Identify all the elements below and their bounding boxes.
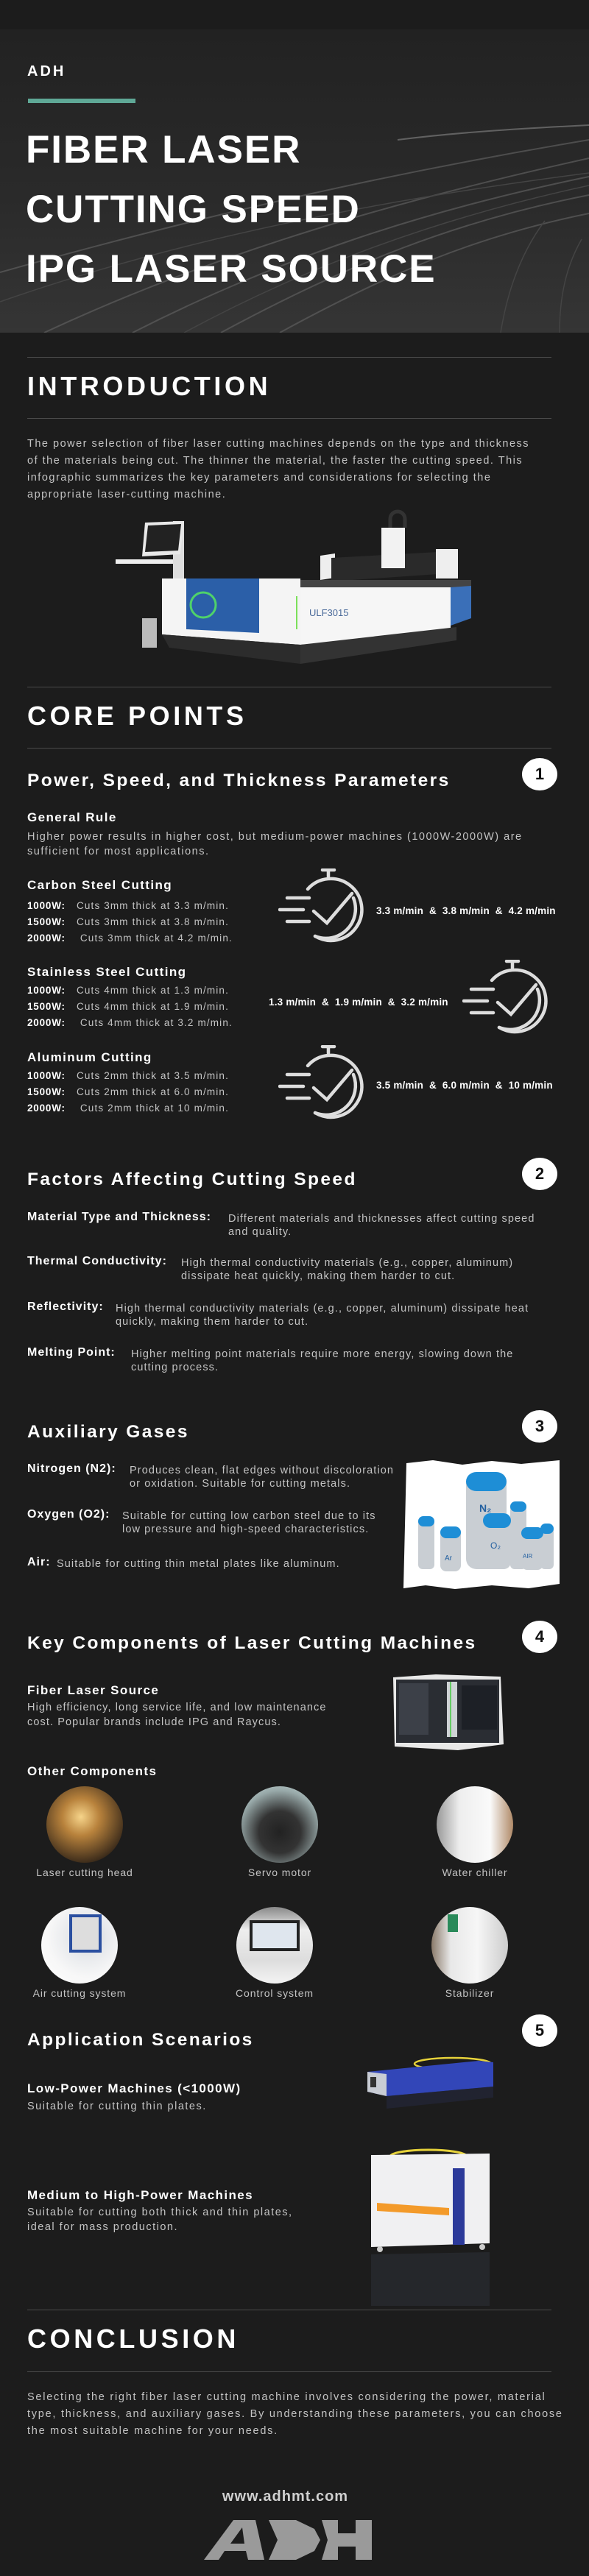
badge 2	[522, 1158, 557, 1190]
factor: reflectivity: Reflectivity:	[27, 1301, 104, 1313]
section 1: power speed thickness: 1000W:	[27, 900, 66, 911]
badge 5: 5	[535, 2021, 544, 2039]
heading 1: Power, Speed, and Thickness Parameters	[27, 771, 451, 790]
section 2: factors	[27, 1158, 557, 1373]
badge 3	[522, 1410, 557, 1443]
brand label ADH: ADH	[27, 63, 66, 79]
heading 5: Application Scenarios	[27, 2030, 254, 2050]
component: water chiller	[437, 1786, 513, 1878]
badge 5	[522, 2014, 557, 2047]
section 5: application scenarios	[27, 2014, 557, 2306]
medium high power: Medium to High-Power Machines	[27, 2188, 253, 2202]
section 1: power speed thickness	[27, 758, 557, 1119]
section 4: key components: cost. Popular brands include IPG and Raycus.	[27, 1716, 281, 1728]
gas: oxygen	[27, 1508, 376, 1535]
intro text: infographic summarizes the key parameters and considerations for selecting the	[27, 472, 491, 484]
component: air cutting system	[32, 1907, 126, 1999]
factor: material	[27, 1211, 535, 1238]
heading: introduction: INTRODUCTION	[27, 371, 271, 401]
gas: oxygen: Suitable for cutting low carbon steel due to its low pressure and high-speed characteristics.	[122, 1510, 376, 1535]
component: stabilizer: Stabilizer	[445, 1987, 494, 1999]
component: control system	[236, 1907, 314, 1999]
badge 3: 3	[535, 1417, 544, 1435]
title	[26, 128, 437, 291]
section 1: power speed thickness: Cuts 3mm thick at 3.8 m/min.	[77, 916, 229, 927]
icon: stopwatch stainless	[462, 960, 548, 1033]
image: gas cylinders: N₂	[479, 1502, 491, 1514]
image: gas cylinders	[403, 1460, 560, 1589]
heading 2: Factors Affecting Cutting Speed	[27, 1170, 357, 1189]
intro text	[27, 438, 529, 500]
gas: nitrogen: Nitrogen (N2):	[27, 1462, 116, 1475]
section 1: power speed thickness: Higher power results in higher cost, but medium-power machines (1000W-2000W) are	[27, 831, 523, 843]
component: control system: Control system	[236, 1987, 314, 1999]
intro text: of the materials being cut. The thinner the material, the faster the cutting speed. This	[27, 455, 523, 467]
section 1: power speed thickness: sufficient for most applications.	[27, 846, 209, 857]
component: servo motor: Servo motor	[248, 1866, 311, 1878]
image: laser cutting machine: ULF3015	[309, 607, 348, 618]
title: CUTTING SPEED	[26, 188, 361, 231]
badge 2: 2	[535, 1164, 544, 1183]
section 5: application scenarios: Suitable for cutting thin plates.	[27, 2101, 207, 2112]
conclusion text: the most suitable machine for your needs.	[27, 2425, 278, 2437]
icon: stopwatch carbon	[278, 868, 364, 942]
section 5: application scenarios: ideal for mass production.	[27, 2221, 178, 2233]
section 1: power speed thickness: Cuts 3mm thick at 3.3 m/min.	[77, 900, 229, 911]
factor: material: Material Type and Thickness:	[27, 1211, 211, 1223]
image: laser cutting machine	[116, 509, 471, 664]
section 1: power speed thickness: Cuts 4mm thick at 1.9 m/min.	[77, 1001, 229, 1012]
logo: ADH	[204, 2520, 372, 2560]
section 1: power speed thickness: 1500W:	[27, 1086, 66, 1097]
heading: conclusion: CONCLUSION	[27, 2324, 239, 2354]
section 1: power speed thickness: 2000W:	[27, 933, 66, 944]
heading 3: Auxiliary Gases	[27, 1422, 189, 1442]
section 5: application scenarios: Suitable for cutting both thick and thin plates,	[27, 2207, 293, 2218]
component: laser cutting head: Laser cutting head	[36, 1866, 133, 1878]
section 1: power speed thickness: 3.5 m/min & 6.0 m/min & 10 m/min	[376, 1080, 553, 1091]
component: water chiller: Water chiller	[442, 1866, 507, 1878]
section 1: power speed thickness: 1500W:	[27, 916, 66, 927]
section 4: key components: High efficiency, long service life, and low maintenance	[27, 1702, 327, 1713]
section 1: power speed thickness: 2000W:	[27, 1103, 66, 1114]
hero banner	[0, 29, 589, 333]
factor: reflectivity: High thermal conductivity materials (e.g., copper, aluminum) dissipate heat quickly, making them harder to cut.	[116, 1303, 529, 1328]
fiber laser source: Fiber Laser Source	[27, 1683, 159, 1697]
gas: air: Suitable for cutting thin metal plates like aluminum.	[57, 1558, 340, 1570]
heading 4: Key Components of Laser Cutting Machines	[27, 1633, 477, 1653]
badge 1: 1	[535, 765, 544, 783]
section 1: power speed thickness: Cuts 2mm thick at 3.5 m/min.	[77, 1070, 229, 1081]
factor: melting: Higher melting point materials require more energy, slowing down the cutting process.	[131, 1348, 513, 1373]
image: gas cylinders: O₂	[490, 1540, 501, 1551]
section 1: power speed thickness: 1000W:	[27, 1070, 66, 1081]
title: FIBER LASER	[26, 128, 301, 171]
general rule: General Rule	[27, 810, 117, 824]
aluminum: Aluminum Cutting	[27, 1050, 152, 1064]
low power: Low-Power Machines (<1000W)	[27, 2081, 241, 2095]
conclusion text: type, thickness, and auxiliary gases. By understanding these parameters, you can choose	[27, 2408, 563, 2420]
section 1: power speed thickness: Cuts 2mm thick at 10 m/min.	[80, 1103, 229, 1114]
component: laser cutting head	[36, 1786, 133, 1878]
factor: melting: Melting Point:	[27, 1346, 116, 1359]
factor: material: Different materials and thicknesses affect cutting speed and quality.	[228, 1213, 535, 1238]
intro text: The power selection of fiber laser cutting machines depends on the type and thickness	[27, 438, 529, 450]
conclusion text	[27, 2391, 563, 2437]
factor: thermal: Thermal Conductivity:	[27, 1255, 167, 1267]
component: stabilizer	[431, 1907, 508, 1999]
image: high power laser source	[371, 2149, 490, 2306]
icon: stopwatch aluminum	[278, 1045, 364, 1119]
image: low power laser source	[367, 2056, 493, 2109]
factor: thermal	[27, 1255, 513, 1282]
image: gas cylinders: Ar	[445, 1554, 453, 1563]
image: laser source	[393, 1674, 504, 1750]
section 1: power speed thickness: 2000W:	[27, 1017, 66, 1028]
image: gas cylinders: AIR	[523, 1553, 533, 1560]
badge 4: 4	[535, 1627, 544, 1646]
badge 1	[522, 758, 557, 790]
carbon steel: Carbon Steel Cutting	[27, 878, 172, 892]
factor: thermal: High thermal conductivity materials (e.g., copper, aluminum) dissipate heat quickly, making them harder to cut.	[181, 1257, 513, 1282]
teal accent bar	[28, 99, 135, 103]
section 1: power speed thickness: 1000W:	[27, 985, 66, 996]
component: air cutting system: Air cutting system	[33, 1987, 126, 1999]
section 1: power speed thickness: Cuts 4mm thick at 1.3 m/min.	[77, 985, 229, 996]
gas: nitrogen: Produces clean, flat edges without discoloration or oxidation. Suitable for cutting metals.	[130, 1465, 394, 1490]
section 4: key components	[27, 1621, 557, 1999]
section 1: power speed thickness: 1.3 m/min & 1.9 m/min & 3.2 m/min	[269, 997, 448, 1008]
section 1: power speed thickness: Cuts 3mm thick at 4.2 m/min.	[80, 933, 233, 944]
website url: www.adhmt.com	[222, 2488, 348, 2505]
title: IPG LASER SOURCE	[26, 247, 437, 291]
other components heading: Other Components	[27, 1764, 157, 1778]
section 3: gases	[27, 1410, 560, 1589]
conclusion text: Selecting the right fiber laser cutting machine involves considering the power, material	[27, 2391, 546, 2403]
gas: nitrogen	[27, 1462, 394, 1490]
section 1: power speed thickness: Cuts 2mm thick at 6.0 m/min.	[77, 1086, 229, 1097]
section 1: power speed thickness: 3.3 m/min & 3.8 m/min & 4.2 m/min	[376, 905, 556, 916]
gas: oxygen: Oxygen (O2):	[27, 1508, 110, 1521]
intro text: appropriate laser-cutting machine.	[27, 489, 226, 500]
section 1: power speed thickness: 1500W:	[27, 1001, 66, 1012]
stainless steel: Stainless Steel Cutting	[27, 965, 186, 979]
badge 4	[522, 1621, 557, 1653]
component: servo motor	[241, 1786, 318, 1878]
heading: core points: CORE POINTS	[27, 701, 247, 731]
section 1: power speed thickness: Cuts 4mm thick at 3.2 m/min.	[80, 1017, 233, 1028]
gas: air: Air:	[27, 1556, 51, 1568]
